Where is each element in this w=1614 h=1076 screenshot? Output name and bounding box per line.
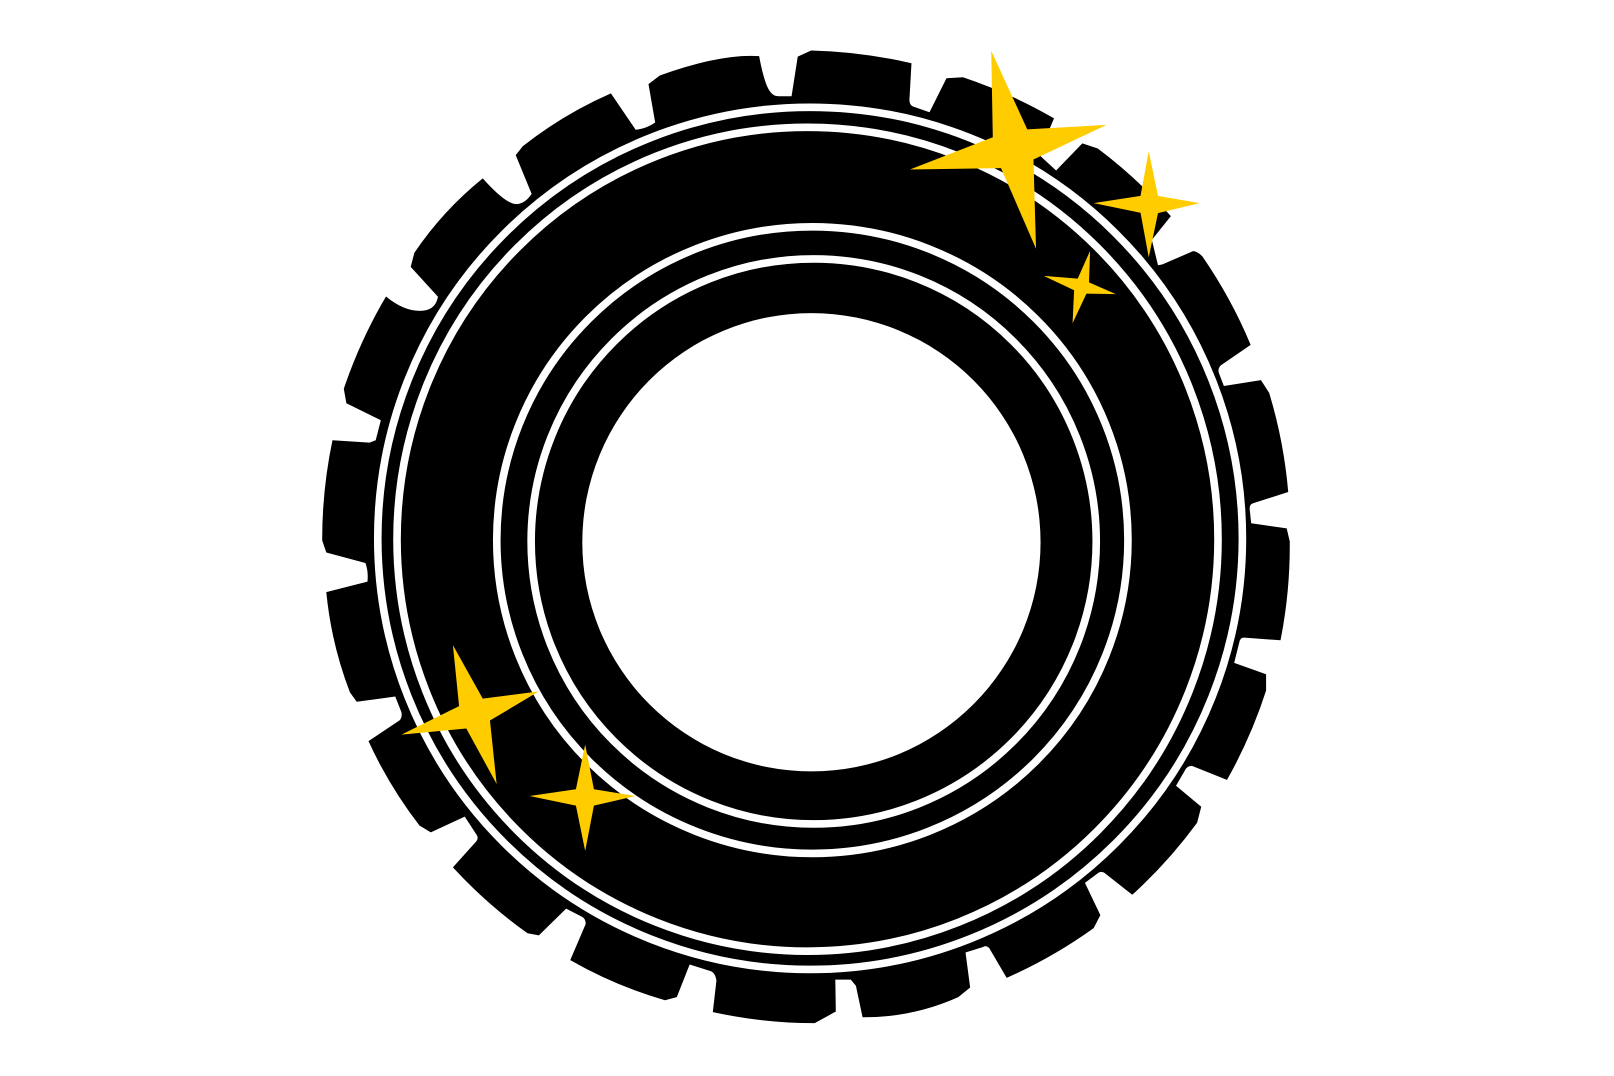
- star: small right: [1044, 251, 1116, 323]
- star: large top: [910, 51, 1107, 249]
- rotor: solid black disc behind the rings: [371, 99, 1250, 978]
- star: large bottom left: [401, 645, 539, 784]
- rings: concentric white lines: [378, 107, 1242, 969]
- hub hole: central white circle: [582, 313, 1041, 771]
- star: bottom: [530, 745, 636, 851]
- gear: toothed black body: [322, 50, 1290, 1023]
- star: top right: [1094, 151, 1200, 257]
